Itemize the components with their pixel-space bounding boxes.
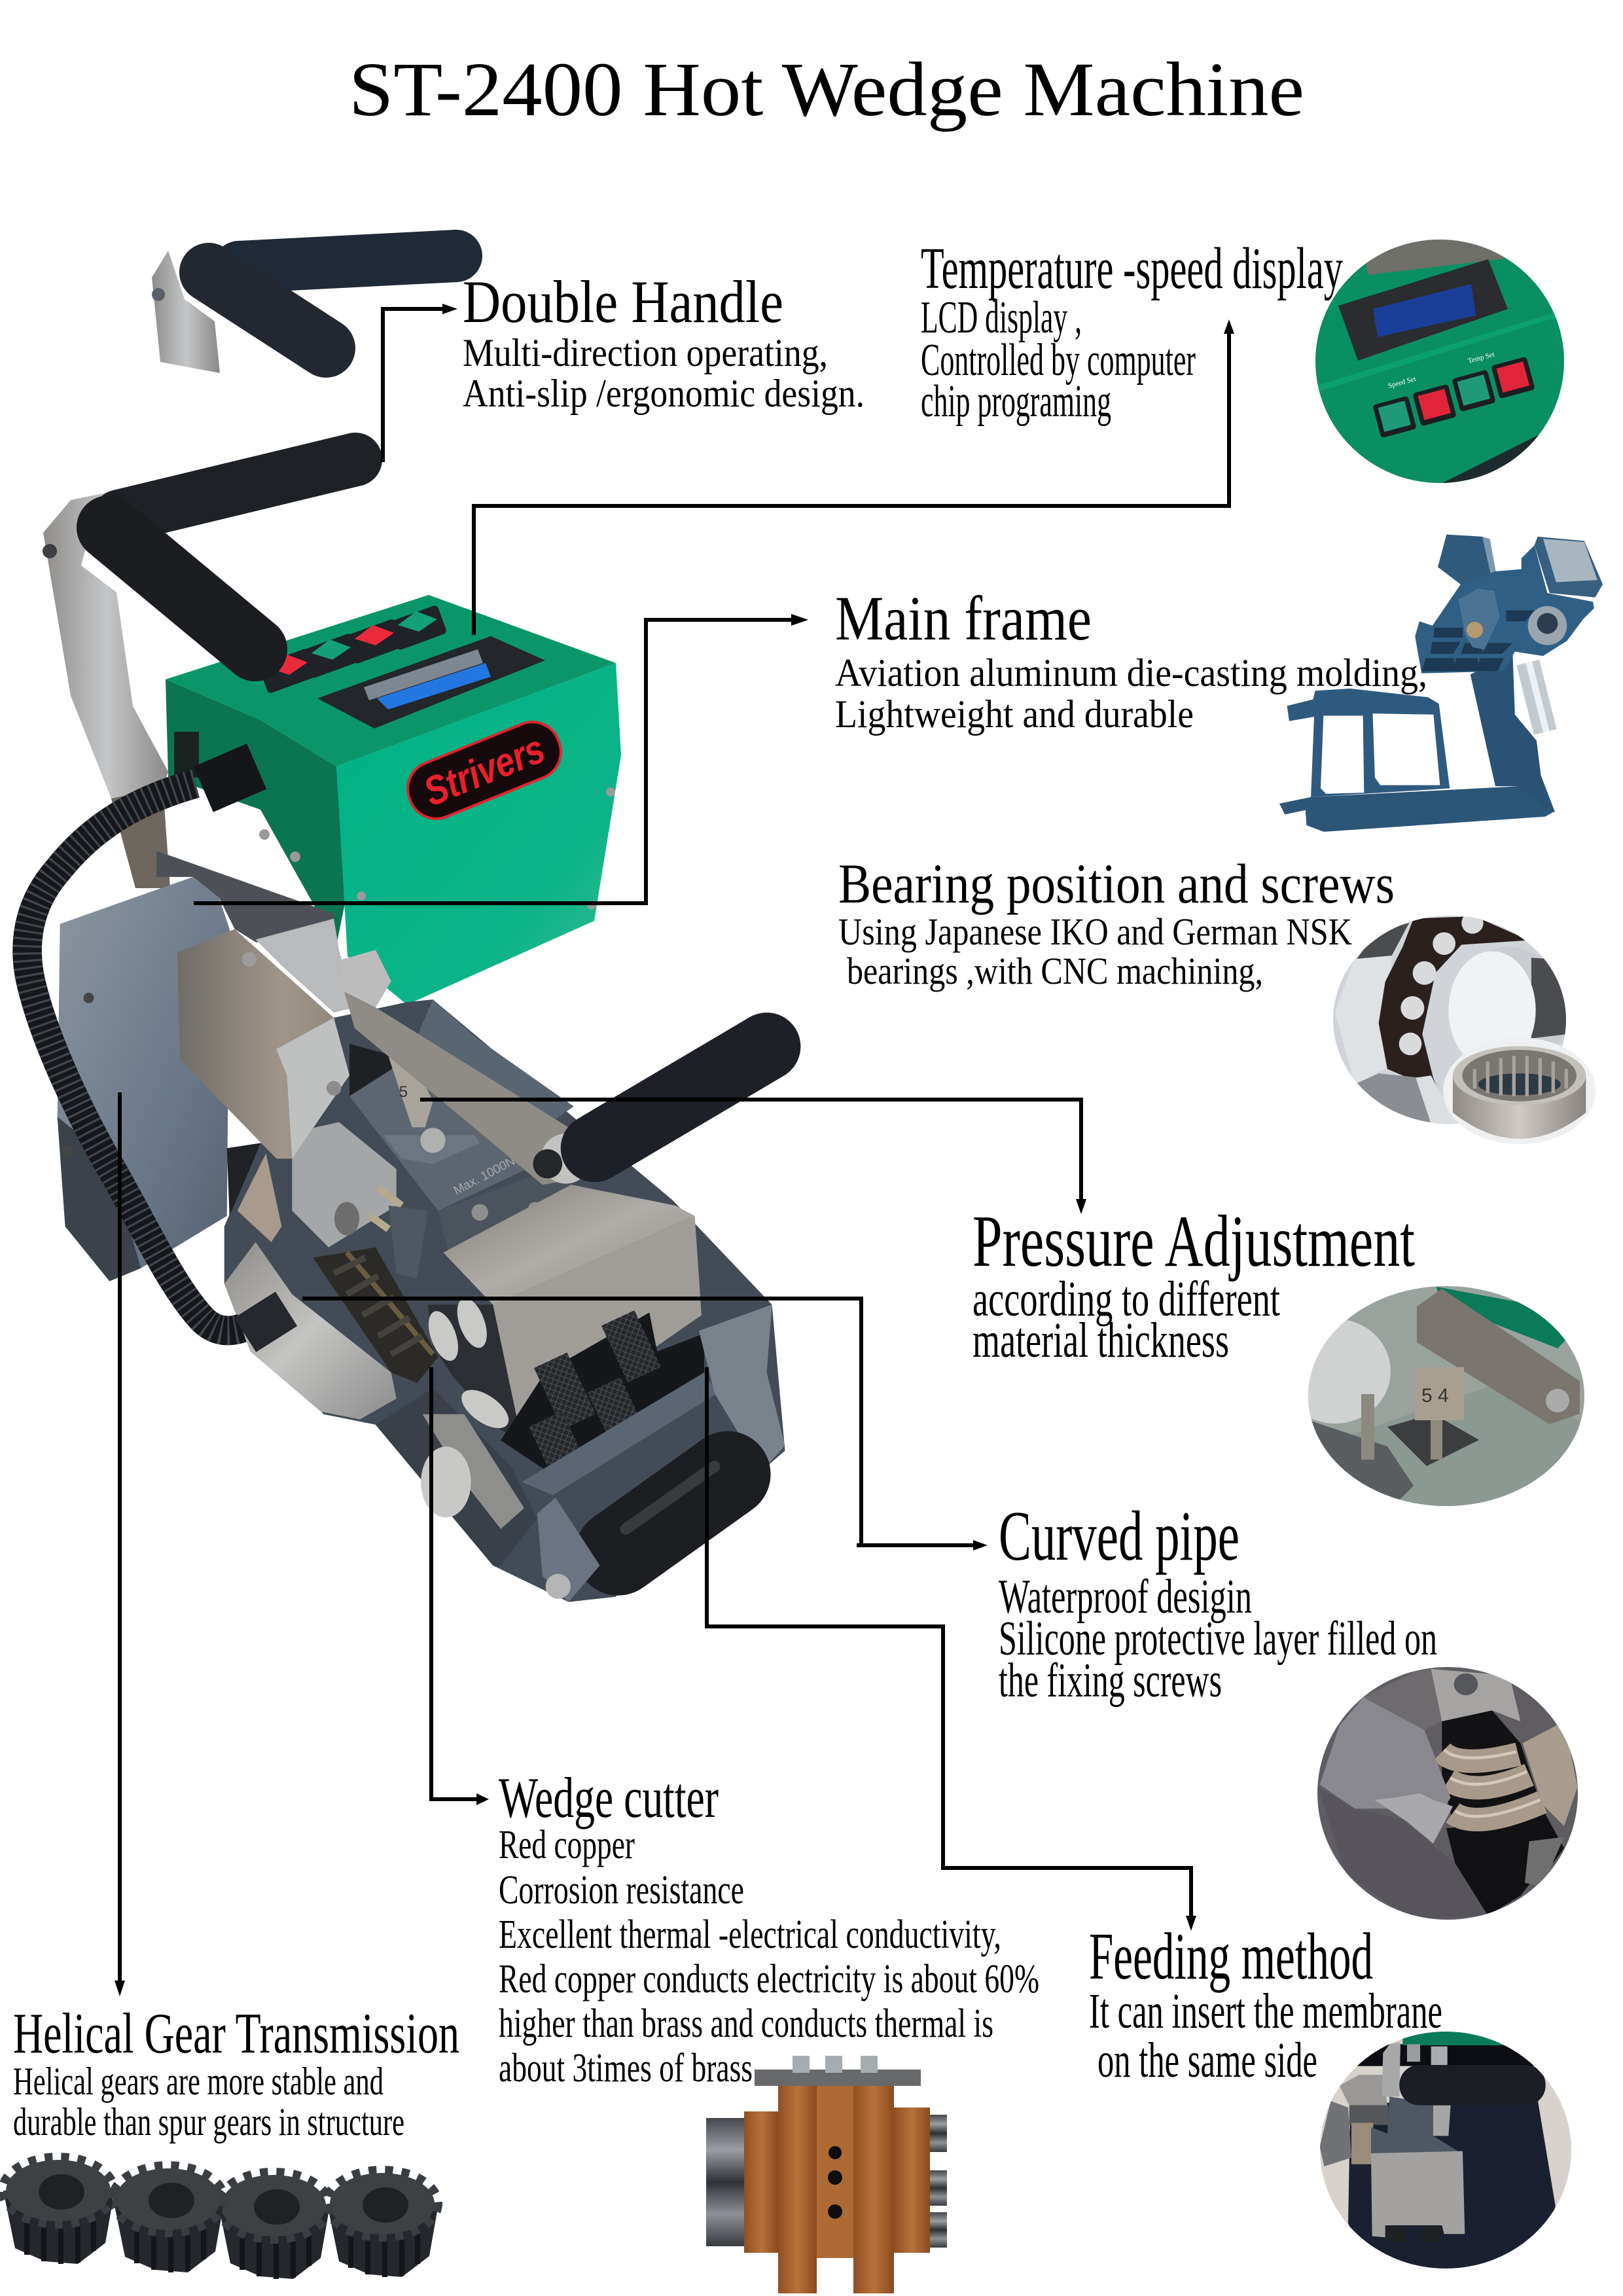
text block: bearing position and screws: Using Japanese IKO and German NSK xyxy=(838,910,1352,953)
text block: pressure adjustment: according to different xyxy=(972,1272,1280,1327)
arrow: main frame callout xyxy=(194,614,808,903)
roller assembly xyxy=(376,1304,785,1602)
pressure plate: Max. 1000N xyxy=(452,1155,518,1198)
text block: curved pipe xyxy=(999,1498,1437,1708)
text block: wedge cutter: higher than brass and conducts thermal is xyxy=(499,2001,993,2046)
text block: wedge cutter: Corrosion resistance xyxy=(499,1868,744,1912)
text block: main frame: Lightweight and durable xyxy=(835,692,1194,736)
title: ST-2400 Hot Wedge Machine xyxy=(349,46,1304,132)
icon: temperature speed display photo: Temp Set xyxy=(1467,351,1495,365)
gauge block: 5 xyxy=(399,1083,408,1101)
side cube and rear block xyxy=(238,1122,402,1247)
silver top bracket xyxy=(256,919,355,1013)
icon: bearing photo xyxy=(1330,912,1596,1144)
front handle grip xyxy=(109,528,255,649)
icon: pressure adjustment photo: 5 4 xyxy=(1421,1385,1449,1407)
text block: pressure adjustment: material thickness xyxy=(972,1313,1229,1368)
gauge block xyxy=(389,1057,446,1153)
icon: temperature speed display photo: Speed Set xyxy=(1387,375,1417,390)
text block: double handle xyxy=(463,268,865,415)
upper rear handle grip xyxy=(119,459,355,516)
text block: double handle: Anti-slip /ergonomic design. xyxy=(463,372,865,415)
pressure lever xyxy=(339,950,591,1185)
lcd display xyxy=(317,636,545,728)
gearbox silver block xyxy=(224,1242,397,1420)
text block: temperature speed display: Controlled by computer xyxy=(921,335,1196,386)
needle bearing xyxy=(1443,1037,1596,1144)
text block: pressure adjustment: Pressure Adjustment xyxy=(972,1201,1415,1282)
text block: wedge cutter xyxy=(499,1767,1039,2090)
arrow: wedge cutter callout xyxy=(431,1367,489,1805)
text block: wedge cutter: Red copper xyxy=(499,1823,635,1867)
icon: double handle detail photo xyxy=(152,251,456,373)
lcd screen xyxy=(1338,259,1508,361)
dark slab under control box xyxy=(156,851,334,950)
icon: copper wedge cutter photo xyxy=(706,2056,947,2293)
text block: bearing position and screws: Bearing position and screws xyxy=(838,852,1395,915)
text block: bearing position and screws: bearings ,with CNC machining, xyxy=(847,950,1263,992)
text block: temperature speed display: LCD display , xyxy=(921,293,1082,343)
text block: feeding method xyxy=(1089,1920,1442,2088)
text block: helical gear transmission: Helical Gear Transmission xyxy=(13,2002,459,2066)
lower machine assembly xyxy=(27,766,785,1602)
Strivers logo: Strivers xyxy=(418,726,551,815)
text block: temperature speed display xyxy=(921,236,1343,427)
icon: feeding method photo xyxy=(1317,2029,1575,2271)
green control box xyxy=(166,595,621,1005)
chassis body xyxy=(224,999,785,1602)
icon: helical gears photo xyxy=(3,2158,438,2279)
arrow: helical gear callout xyxy=(115,1092,125,1996)
text block: feeding method: Feeding method xyxy=(1089,1920,1373,1994)
icon: pressure adjustment photo xyxy=(1308,1286,1584,1506)
icon: main frame casting photo xyxy=(1279,535,1603,832)
arrow: double handle callout xyxy=(383,304,457,462)
text block: curved pipe: Curved pipe xyxy=(999,1498,1240,1575)
text block: double handle: Multi-direction operating, xyxy=(463,331,828,374)
arrow: feeding method callout xyxy=(707,1367,1196,1931)
text block: wedge cutter: Red copper conducts electricity is about 60% xyxy=(499,1957,1039,2001)
helical gears inside machine xyxy=(313,1247,438,1383)
text block: helical gear transmission xyxy=(13,2002,459,2144)
text block: wedge cutter: Wedge cutter xyxy=(499,1767,719,1830)
text block: feeding method: It can insert the membrane xyxy=(1089,1984,1442,2039)
knurled feed wheels xyxy=(501,1310,704,1471)
text block: curved pipe: the fixing screws xyxy=(999,1654,1222,1708)
text block: main frame: Aviation aluminum die-casting molding, xyxy=(835,651,1427,694)
text block: main frame xyxy=(835,583,1427,736)
silver cover block xyxy=(177,929,349,1158)
left gearbox housing xyxy=(58,877,261,1282)
text block: bearing position and screws xyxy=(838,852,1395,992)
arrow: curved pipe callout xyxy=(302,1299,988,1551)
control buttons xyxy=(259,605,447,694)
text block: main frame: Main frame xyxy=(835,583,1092,653)
text block: temperature speed display: chip programing xyxy=(921,376,1111,427)
text block: temperature speed display: Temperature -speed display xyxy=(921,236,1343,301)
text block: pressure adjustment xyxy=(972,1201,1415,1368)
text block: wedge cutter: about 3times of brass xyxy=(499,2046,753,2090)
text block: double handle: Double Handle xyxy=(463,268,783,335)
text block: wedge cutter: Excellent thermal -electrical conductivity, xyxy=(499,1912,1001,1957)
silver handle arm xyxy=(43,492,170,888)
text block: helical gear transmission: Helical gears are more stable and xyxy=(13,2060,383,2103)
corrugated cable xyxy=(27,766,287,1335)
third handle grip xyxy=(595,1047,767,1148)
pressure plate xyxy=(349,1060,574,1279)
lower frame with windows xyxy=(1287,689,1450,797)
icon: temperature speed display photo xyxy=(1309,236,1571,484)
icon: curved pipe photo xyxy=(1313,1664,1584,1924)
buttons xyxy=(1372,357,1535,438)
arrow: pressure adjustment callout xyxy=(420,1100,1086,1214)
text block: feeding method: on the same side xyxy=(1097,2033,1317,2088)
text block: helical gear transmission: durable than spur gears in structure xyxy=(13,2100,404,2144)
stainless steel cover xyxy=(423,1185,702,1441)
arrow: temperature display callout xyxy=(474,319,1234,635)
text block: curved pipe: Waterproof desigin xyxy=(999,1570,1252,1624)
